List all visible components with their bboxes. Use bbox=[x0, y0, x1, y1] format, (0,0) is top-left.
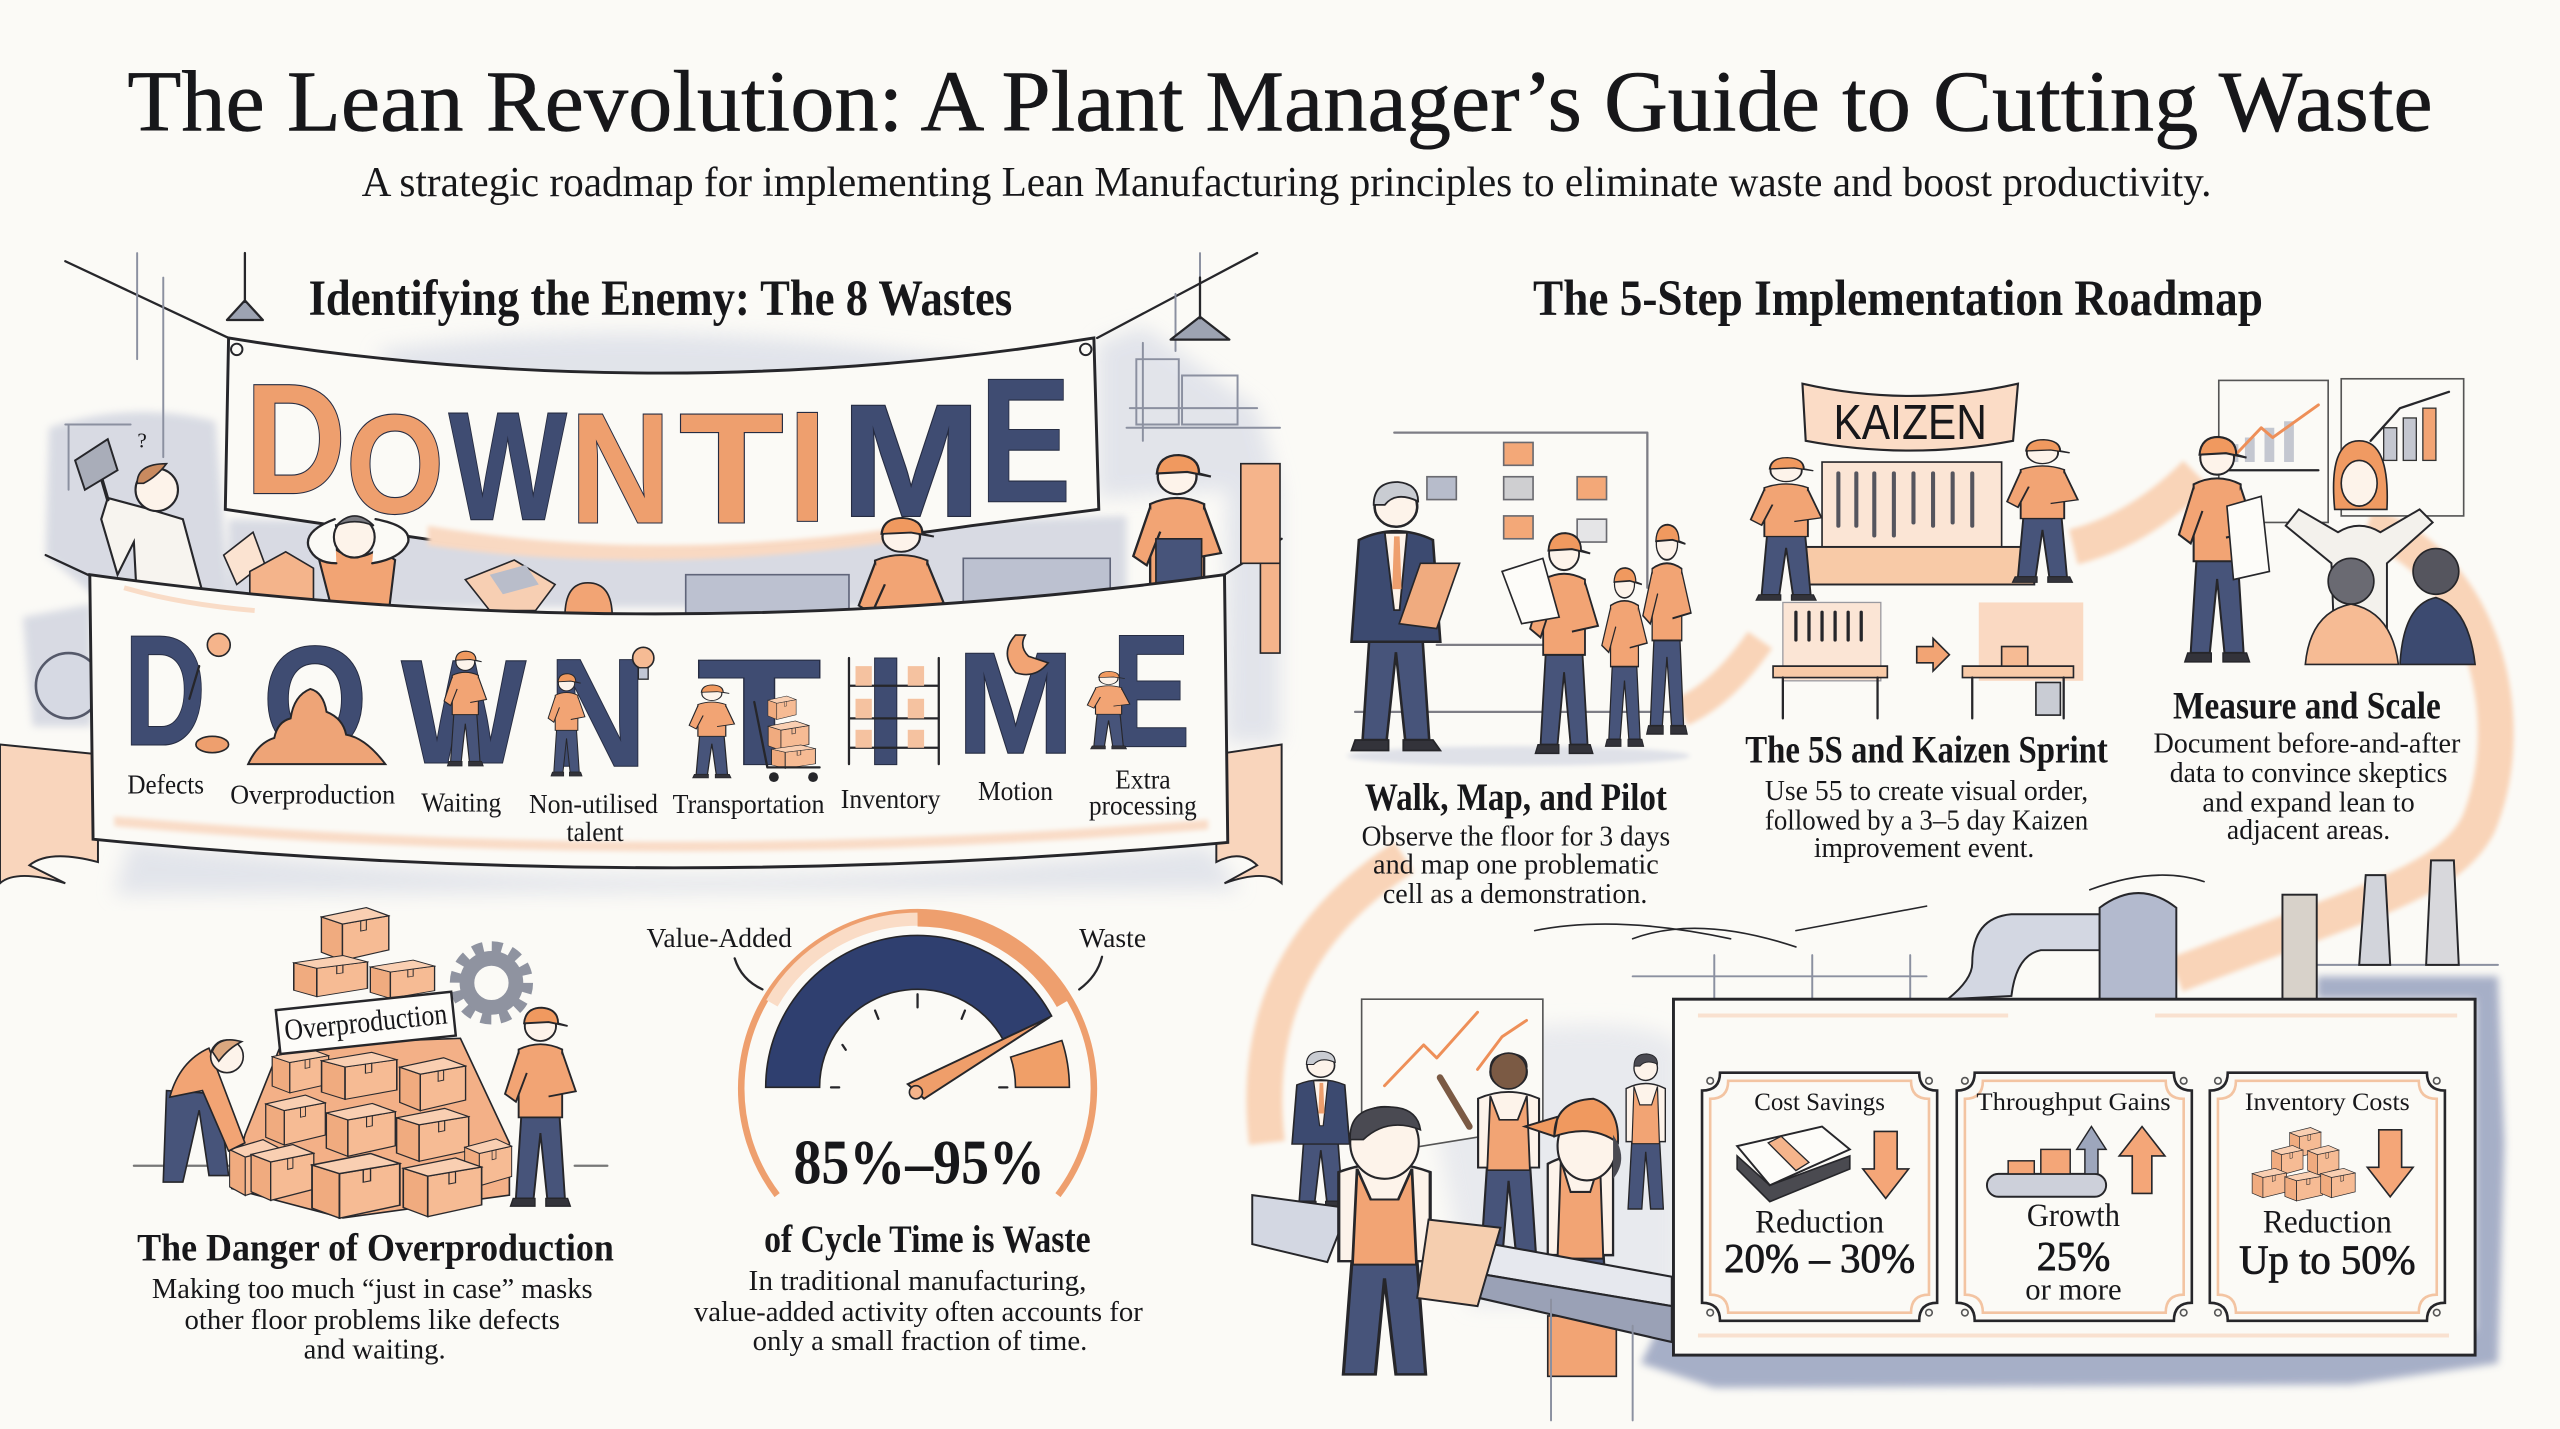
letters: D bbox=[124, 603, 206, 778]
body copy: The Danger of Overproduction bbox=[137, 1226, 614, 1269]
card: throughput gains: or more bbox=[2025, 1273, 2122, 1307]
right ribbon tail bbox=[1216, 744, 1282, 883]
waste labels bbox=[127, 765, 1197, 848]
icon: extra processing worker bbox=[1087, 671, 1130, 749]
icon: overproduction pile bbox=[248, 689, 385, 764]
chart poster right bbox=[2341, 379, 2464, 516]
icon: waiting worker bbox=[444, 651, 487, 766]
icon: box cluster bbox=[2252, 1128, 2355, 1201]
letters: W bbox=[402, 630, 526, 794]
banner letters: N bbox=[570, 381, 671, 556]
card: inventory costs: Up to 50% bbox=[2239, 1237, 2416, 1282]
waste labels: Transportation bbox=[673, 789, 825, 820]
factory tower bbox=[2282, 895, 2317, 999]
body copy: Making too much “just in case” masks bbox=[152, 1274, 593, 1305]
gauge caption: value-added activity often accounts for bbox=[694, 1297, 1143, 1328]
label: waste bbox=[1079, 923, 1146, 989]
chart board bbox=[1362, 999, 1543, 1156]
factory tank bbox=[2100, 893, 2176, 999]
worker with cap at desk bbox=[859, 518, 944, 720]
woman in cap bbox=[1525, 1099, 1621, 1376]
waste labels: Defects bbox=[127, 769, 204, 800]
worker with mug bbox=[1643, 525, 1691, 734]
chart poster left bbox=[2219, 380, 2328, 522]
waste labels: processing bbox=[1089, 791, 1197, 822]
gauge needle bbox=[908, 1017, 1050, 1099]
banner letters: E bbox=[980, 342, 1071, 539]
gauge caption: In traditional manufacturing, bbox=[749, 1266, 1087, 1297]
panel: danger of overproduction bbox=[134, 908, 614, 1365]
step text: data to convince skeptics bbox=[2170, 758, 2447, 789]
gauge caption: only a small fraction of time. bbox=[753, 1326, 1087, 1357]
heading: 8 wastes: Identifying the Enemy: The 8 Wastes bbox=[309, 270, 1012, 326]
gauge orange waste band bbox=[1011, 1040, 1069, 1087]
panicked worker bbox=[308, 516, 408, 614]
step text: and map one problematic bbox=[1373, 849, 1659, 880]
factory backdrop bottom right bbox=[1420, 860, 2504, 1388]
pointing man bbox=[1440, 1053, 1539, 1255]
box pile center-left bbox=[224, 532, 313, 607]
workbench bbox=[1794, 547, 2034, 584]
box tower bbox=[230, 908, 512, 1218]
banner: top DOWNTIME bbox=[225, 338, 1099, 560]
step text: The 5S and Kaizen Sprint bbox=[1745, 728, 2108, 771]
banner letters: D bbox=[245, 352, 346, 527]
banner letters: I bbox=[789, 380, 826, 555]
stat: 85–95 percent: 85%–95% bbox=[793, 1127, 1045, 1198]
waste labels: Extra bbox=[1115, 765, 1171, 796]
icon: up arrow bbox=[2119, 1127, 2165, 1193]
body copy bbox=[137, 1226, 614, 1365]
waste labels: Waiting bbox=[421, 787, 501, 818]
background woman bbox=[1626, 1054, 1665, 1209]
card: throughput gains: Throughput Gains bbox=[1976, 1088, 2171, 1116]
gauge caption: of Cycle Time is Waste bbox=[764, 1218, 1091, 1261]
letters: M bbox=[957, 624, 1074, 784]
icon: transport worker with cart bbox=[689, 685, 820, 782]
letters: I bbox=[865, 625, 906, 797]
sticky notes bbox=[1427, 442, 1607, 542]
body copy: and waiting. bbox=[304, 1334, 446, 1365]
gauge outer ring bbox=[741, 912, 1094, 1195]
man with hammer: ? bbox=[137, 428, 147, 452]
body copy: other floor problems like defects bbox=[184, 1305, 560, 1336]
icon: gear bbox=[457, 949, 526, 1017]
orange boxes right edge bbox=[1241, 464, 1280, 653]
icon: conveyor with bars bbox=[1987, 1127, 2106, 1197]
letters: E bbox=[1112, 601, 1190, 780]
card: inventory costs: Inventory Costs bbox=[2245, 1088, 2410, 1116]
smokestack left bbox=[2359, 875, 2390, 965]
banner letters bbox=[245, 342, 1071, 556]
waste scene characters between banners bbox=[75, 428, 1221, 720]
worker holding map bbox=[1502, 533, 1598, 753]
waste labels: talent bbox=[567, 817, 624, 848]
panel: step 5S and kaizen bbox=[1745, 384, 2108, 864]
left worker bbox=[1751, 458, 1821, 600]
card: throughput gains bbox=[1957, 1073, 2192, 1321]
pegboard with tools bbox=[1822, 462, 2002, 547]
banner letters: M bbox=[841, 371, 981, 550]
card: inventory costs bbox=[2210, 1073, 2445, 1321]
gauge caption bbox=[694, 1218, 1143, 1357]
step text: Observe the floor for 3 days bbox=[1362, 822, 1670, 853]
waste labels: Overproduction bbox=[230, 779, 395, 810]
card: cost savings bbox=[1702, 1073, 1937, 1321]
icon: idle talent worker bbox=[548, 674, 585, 776]
floor line bbox=[134, 1165, 607, 1167]
label: value-added bbox=[647, 923, 792, 989]
kaizen banner bbox=[1802, 384, 2018, 451]
label: waste: Waste bbox=[1079, 923, 1146, 954]
card: cost savings: Cost Savings bbox=[1754, 1088, 1885, 1116]
stacked crates right bbox=[1127, 359, 1280, 428]
worker lifting a box bbox=[163, 1040, 245, 1182]
icon: down arrow bbox=[1863, 1131, 1909, 1198]
floor shadow bbox=[1347, 746, 1690, 766]
waste labels: Inventory bbox=[841, 784, 941, 815]
card: inventory costs: Reduction bbox=[2263, 1205, 2392, 1241]
before state table bbox=[1773, 602, 1887, 718]
presenter woman bbox=[2286, 441, 2433, 653]
step text: improvement event. bbox=[1814, 833, 2034, 864]
smokestack right bbox=[2426, 860, 2459, 965]
step text: Document before-and-after bbox=[2153, 729, 2461, 760]
heading: roadmap: The 5-Step Implementation Roadmap bbox=[1533, 270, 2263, 326]
manager with clipboard bbox=[1352, 482, 1460, 751]
icon: motion arm bbox=[1007, 635, 1048, 675]
waste labels: Non-utilised bbox=[529, 789, 658, 820]
panel: step measure and scale bbox=[2153, 379, 2475, 846]
left ribbon tail bbox=[0, 744, 98, 883]
icon: hanging lamp left bbox=[227, 253, 263, 320]
man with clipboard bbox=[1339, 1107, 1500, 1374]
man with hammer bbox=[75, 428, 206, 604]
older man bbox=[1292, 1051, 1350, 1207]
icon: hanging lamp right bbox=[1171, 278, 1229, 340]
orange apple blob bbox=[565, 583, 612, 617]
panel: step walk map pilot bbox=[1347, 433, 1691, 910]
letters: N bbox=[549, 627, 647, 799]
icon: money stack bbox=[1737, 1127, 1850, 1202]
short worker bbox=[1602, 568, 1647, 746]
kaizen banner: KAIZEN bbox=[1833, 396, 1987, 450]
front conveyor bbox=[1478, 1244, 1672, 1420]
banner body bbox=[90, 575, 1228, 868]
panel: factory backdrop for the 8 wastes bbox=[23, 253, 1282, 895]
letters: O bbox=[263, 615, 367, 783]
card: throughput gains: 25% bbox=[2037, 1234, 2110, 1279]
right worker bbox=[2007, 440, 2078, 582]
audience heads bbox=[2305, 549, 2475, 664]
step text bbox=[2153, 684, 2461, 846]
panel: cycle time gauge bbox=[647, 912, 1146, 1357]
panel: results team bbox=[1252, 999, 1672, 1420]
icon: defect donut bbox=[189, 633, 230, 753]
card: throughput gains: Growth bbox=[2027, 1198, 2120, 1234]
waste labels: Motion bbox=[978, 776, 1053, 807]
label: value-added: Value-Added bbox=[647, 923, 792, 954]
presenter man bbox=[2179, 437, 2269, 662]
letters: T bbox=[697, 628, 821, 796]
open box center bbox=[465, 560, 555, 611]
step text bbox=[1362, 776, 1670, 910]
step text: cell as a demonstration. bbox=[1383, 879, 1647, 910]
step text: adjacent areas. bbox=[2227, 815, 2390, 846]
gear sketch bbox=[36, 653, 101, 718]
step text: and expand lean to bbox=[2202, 787, 2415, 818]
machine stack bbox=[686, 558, 1110, 629]
banner letters: W bbox=[449, 380, 567, 552]
arrow: before to after bbox=[1917, 638, 1949, 671]
overproduction sign: Overproduction bbox=[283, 996, 449, 1047]
worker in overalls bbox=[1133, 455, 1221, 688]
back conveyor bbox=[1252, 1195, 1349, 1262]
banner letters: T bbox=[679, 381, 784, 556]
whiteboard bbox=[1355, 433, 1682, 712]
title: The Lean Revolution: A Plant Manager’s Guide to Cutting Waste bbox=[127, 54, 2433, 150]
step text: followed by a 3–5 day Kaizen bbox=[1765, 805, 2088, 836]
icon: inventory shelves bbox=[849, 658, 939, 764]
subtitle: A strategic roadmap for implementing Lean Manufacturing principles to eliminate waste and boost productivity. bbox=[362, 159, 2211, 206]
banner: bottom DOWNTIME acronym bbox=[0, 575, 1282, 883]
step text: Walk, Map, and Pilot bbox=[1365, 776, 1667, 819]
icon: down arrow bbox=[2367, 1130, 2413, 1197]
step text: Measure and Scale bbox=[2173, 684, 2441, 727]
card: cost savings: 20% – 30% bbox=[1724, 1236, 1915, 1281]
factory pipe bbox=[1948, 914, 2100, 999]
gauge ticks bbox=[831, 994, 1007, 1087]
gauge navy value-added band bbox=[766, 935, 1052, 1087]
roadmap path strokes bbox=[1264, 473, 2496, 1143]
worker with wrench bbox=[505, 1008, 576, 1206]
step text: Use 55 to create visual order, bbox=[1765, 776, 2088, 807]
step text bbox=[1745, 728, 2108, 864]
panel: results board bbox=[1673, 999, 2475, 1355]
after state table bbox=[1962, 602, 2083, 718]
letters bbox=[124, 601, 1190, 799]
banner letters: O bbox=[346, 386, 444, 543]
icon: light bulb bbox=[633, 647, 654, 679]
card: cost savings: Reduction bbox=[1755, 1205, 1884, 1241]
